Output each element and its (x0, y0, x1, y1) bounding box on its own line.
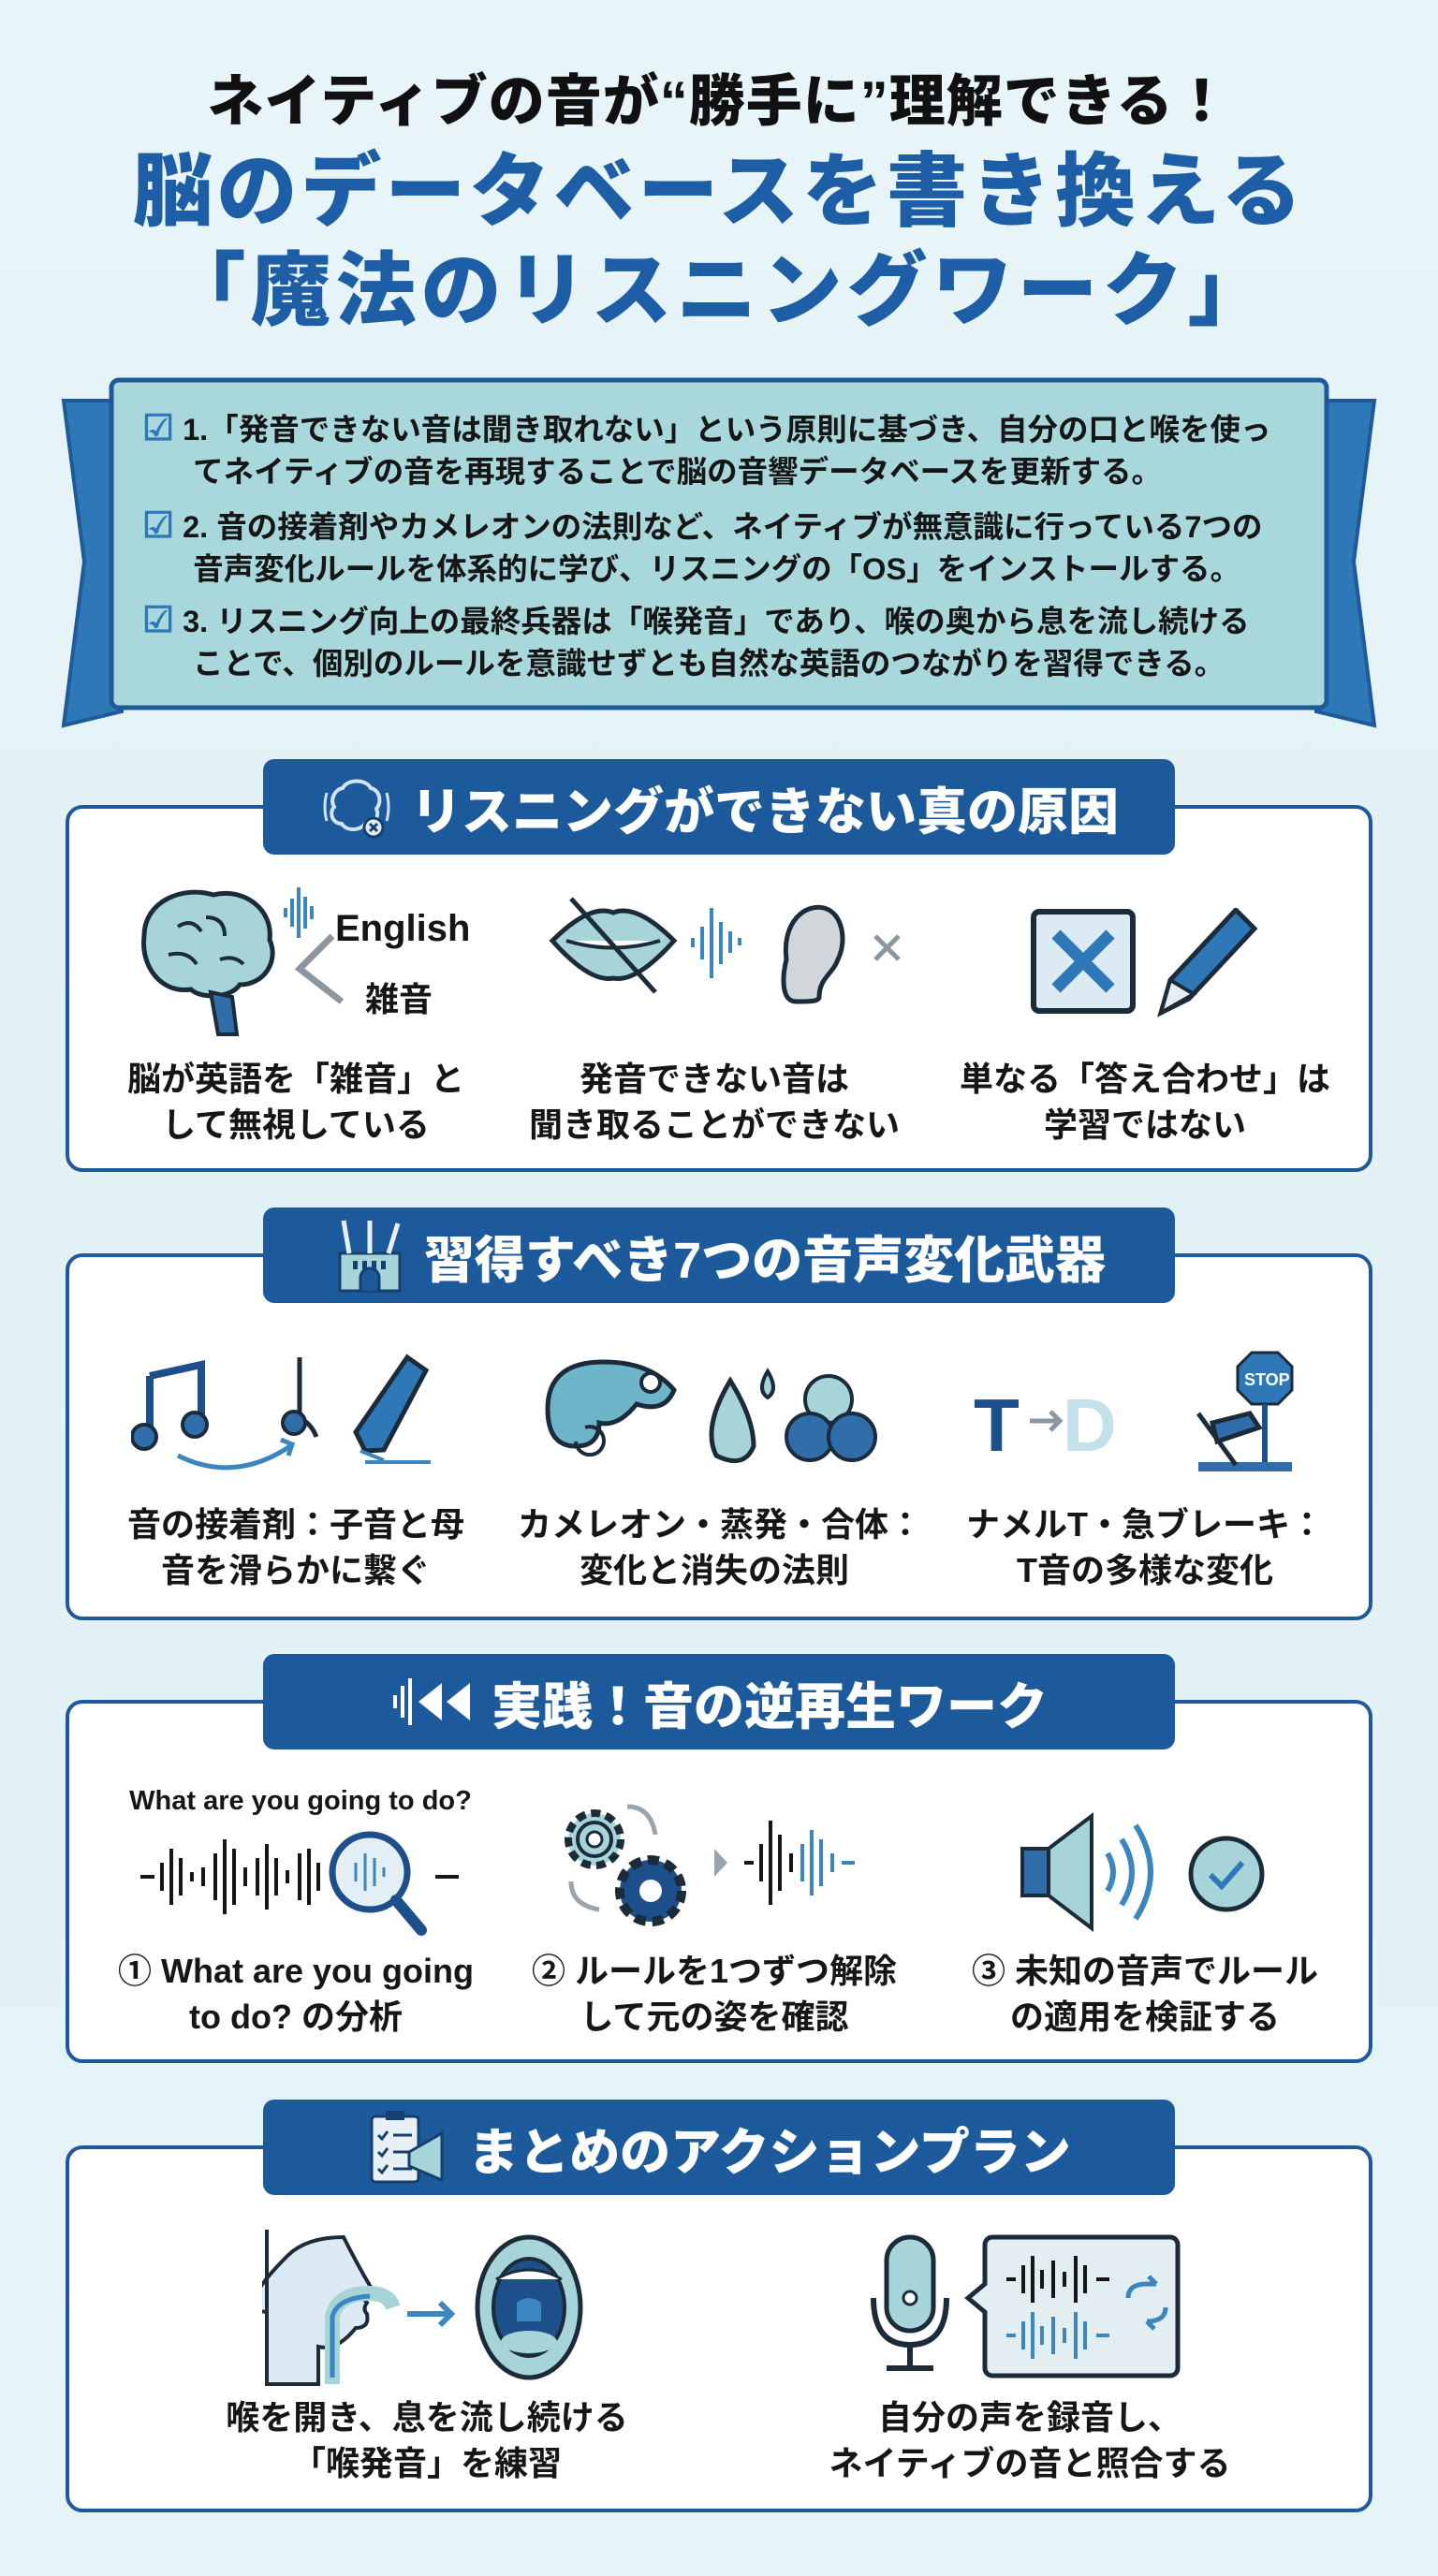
panel: weapons (66, 1253, 1372, 1620)
icon: tool box (339, 1221, 401, 1292)
panel: practice (66, 1700, 1372, 2063)
title line 1: ネイティブの音が“勝手に”理解できる！ (208, 70, 1230, 133)
icon: throat mouth (262, 2230, 582, 2386)
caption: step 3: の適用を検証する (1010, 1998, 1280, 2036)
summary banner (62, 378, 1376, 728)
icon: gears wave (565, 1805, 855, 1926)
caption: glue (127, 1505, 464, 1589)
icon: chameleon drops blobs (545, 1359, 877, 1464)
icon: brain english noise: English (335, 908, 468, 949)
heading: action plan (263, 2100, 1175, 2195)
caption: step 3 (972, 1952, 1318, 2036)
caption: answer check: 単なる「答え合わせ」は (960, 1060, 1330, 1098)
bullet 1: てネイティブの音を再現することで脳の音響データベースを更新する。 (193, 455, 1162, 489)
icon: brain x (324, 779, 389, 839)
caption: step 1 (118, 1952, 474, 2036)
caption: glue: 音の接着剤：子音と母 (127, 1505, 464, 1544)
bullet 1 (142, 409, 1270, 489)
caption: step 2 (532, 1952, 897, 2036)
icon: waveform magnifier (140, 1831, 459, 1936)
icon: lips wave ear (549, 897, 901, 1003)
bullet 3 (142, 601, 1250, 681)
icon: brain english noise (141, 887, 468, 1036)
caption: T changes (966, 1505, 1324, 1589)
icon: rewind (393, 1678, 470, 1725)
caption: throat voice: 「喉発音」を練習 (292, 2444, 562, 2482)
bullet 3: ことで、個別のルールを意識せずとも自然な英語のつながりを習得できる。 (193, 647, 1225, 681)
heading: weapons: 習得すべき7つの音声変化武器 (424, 1232, 1106, 1288)
heading: weapons (263, 1208, 1175, 1303)
heading: practice: 実践！音の逆再生ワーク (492, 1679, 1048, 1735)
caption: glue: 音を滑らかに繋ぐ (161, 1551, 431, 1589)
icon: notes glue (131, 1354, 431, 1470)
icon: brain english noise: 雑音 (365, 973, 433, 1021)
title line 3: 「魔法のリスニングワーク」 (165, 246, 1273, 336)
caption: cannot pronounce: 聞き取ることができない (529, 1105, 900, 1144)
caption: T changes: T音の多様な変化 (1017, 1551, 1273, 1589)
caption: chameleon: 変化と消失の法則 (580, 1551, 849, 1589)
bullet 2 (142, 506, 1262, 586)
caption: throat voice: 喉を開き、息を流し続ける (226, 2398, 628, 2437)
bullet 1: ☑ 1.「発音できない音は聞き取れない」という原則に基づき、自分の口と喉を使っ (142, 409, 1270, 448)
panel: action plan (66, 2145, 1372, 2512)
caption: record compare: 自分の声を録音し、 (878, 2398, 1181, 2437)
caption: brain ignores: して無視している (162, 1105, 430, 1144)
icon: clipboard megaphone (371, 2111, 444, 2183)
heading: action plan: まとめのアクションプラン (468, 2125, 1071, 2181)
caption: chameleon: カメレオン・蒸発・合体： (518, 1505, 922, 1544)
bullet 2: 音声変化ルールを体系的に学び、リスニングの「OS」をインストールする。 (193, 552, 1240, 586)
caption: step 2: して元の姿を確認 (580, 1998, 848, 2036)
caption: step 1: to do? の分析 (189, 1998, 403, 2036)
title line 2: 脳のデータベースを書き換える (132, 147, 1306, 237)
bullet 3: ☑ 3. リスニング向上の最終兵器は「喉発音」であり、喉の奥から息を流し続ける (142, 601, 1250, 640)
caption: answer check (960, 1060, 1330, 1144)
icon: mic and compare (871, 2235, 1180, 2378)
bullet 2: ☑ 2. 音の接着剤やカメレオンの法則など、ネイティブが無意識に行っている7つの (142, 506, 1262, 546)
icon: T to D stop pedal: T (974, 1383, 1020, 1467)
icon: T to D stop pedal (974, 1352, 1294, 1471)
icon: T to D stop pedal: D (1063, 1383, 1117, 1467)
caption: cannot pronounce (529, 1060, 900, 1144)
caption: record compare: ネイティブの音と照合する (829, 2444, 1231, 2482)
caption: step 1: ① What are you going (118, 1952, 474, 1990)
caption: cannot pronounce: 発音できない音は (580, 1060, 849, 1098)
caption: step 3: ③ 未知の音声でルール (972, 1952, 1318, 1990)
caption: answer check: 学習ではない (1044, 1105, 1246, 1144)
caption: step 2: ② ルールを1つずつ解除 (532, 1952, 897, 1990)
heading: practice (263, 1654, 1175, 1749)
heading: causes (263, 759, 1175, 855)
caption: chameleon (518, 1505, 922, 1589)
caption: T changes: ナメルT・急ブレーキ： (966, 1505, 1324, 1544)
panel: causes (66, 805, 1372, 1172)
caption: record compare (829, 2398, 1231, 2482)
caption: brain ignores (127, 1060, 464, 1144)
heading: causes: リスニングができない真の原因 (411, 784, 1119, 841)
icon: T to D stop pedal: STOP (1244, 1370, 1290, 1389)
icon: x box pencil (1031, 908, 1258, 1017)
text: sample sentence: What are you going to do? (129, 1786, 472, 1816)
caption: throat voice (226, 2398, 628, 2482)
caption: brain ignores: 脳が英語を「雑音」と (127, 1060, 464, 1098)
icon: speaker check (1020, 1812, 1264, 1932)
